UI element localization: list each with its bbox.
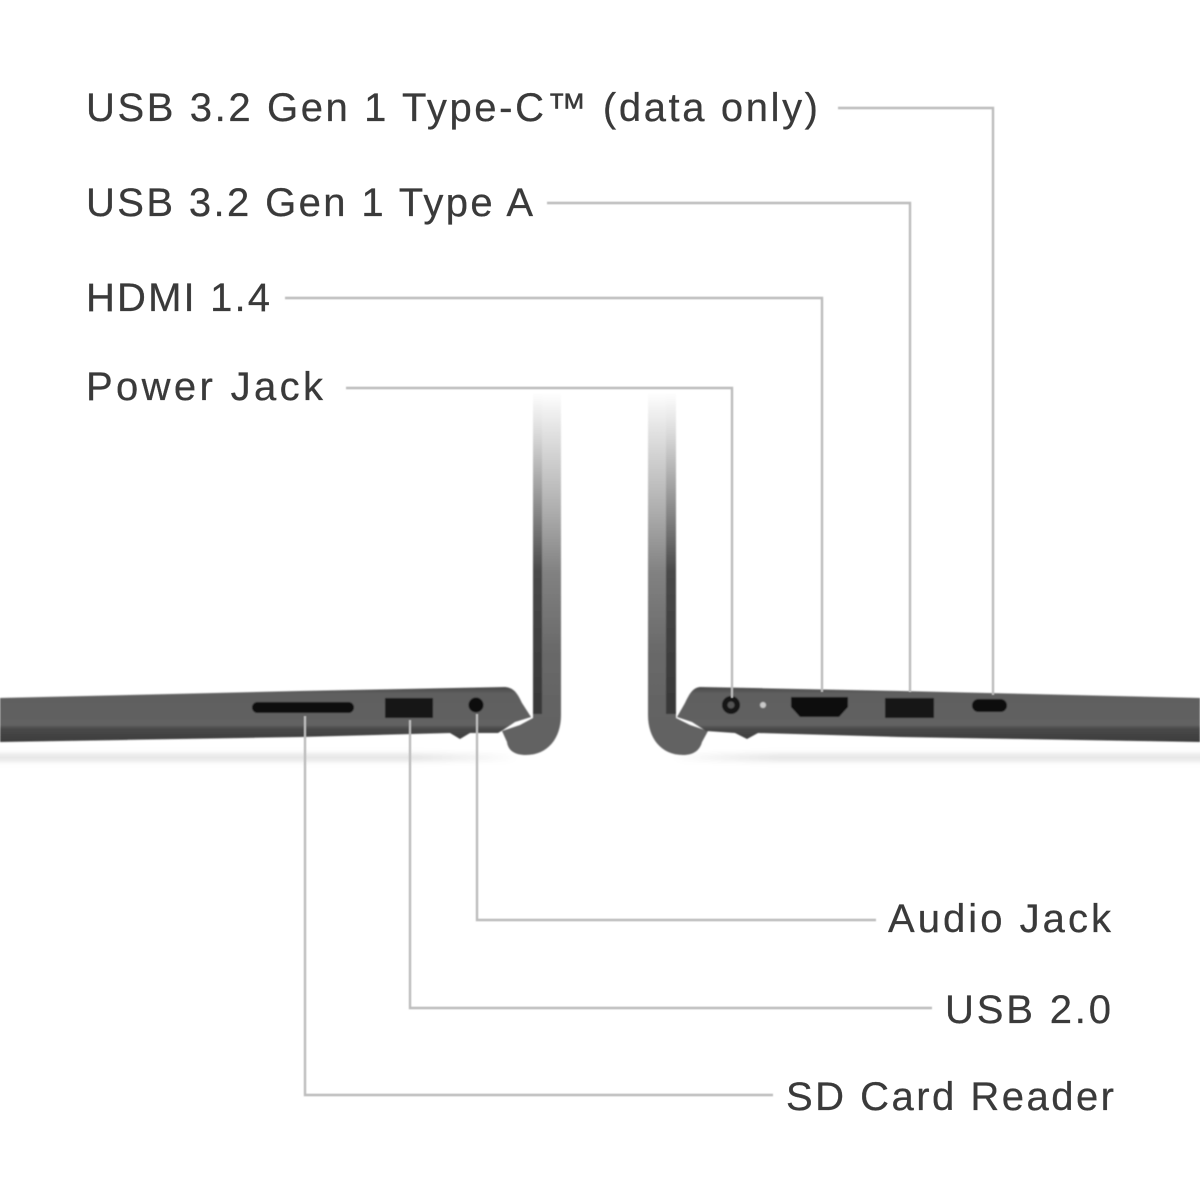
left laptop side xyxy=(0,392,561,755)
right lid and hinge xyxy=(648,392,708,755)
line: HDMI xyxy=(285,298,822,692)
ground shadow xyxy=(0,754,1200,761)
line: USB Type-C xyxy=(838,108,993,695)
status LED xyxy=(760,702,766,708)
left lid and hinge xyxy=(502,392,561,755)
label: USB 3.2 Gen 1 Type A: USB 3.2 Gen 1 Type A xyxy=(86,181,533,225)
line: SD card reader xyxy=(305,716,773,1095)
SD card slot xyxy=(252,702,354,713)
HDMI port xyxy=(791,697,848,717)
power jack xyxy=(722,696,740,714)
line: USB Type A xyxy=(547,203,910,692)
right base xyxy=(677,687,1200,742)
label: Audio Jack: Audio Jack xyxy=(888,897,1112,941)
label: HDMI 1.4: HDMI 1.4 xyxy=(86,276,270,320)
line: power jack xyxy=(346,388,732,698)
right laptop side xyxy=(648,392,1200,755)
USB Type A port xyxy=(885,698,934,718)
USB 2.0 port xyxy=(385,698,433,718)
label: USB 3.2 Gen 1 Type-C: USB 3.2 Gen 1 Type-C™ (data only) xyxy=(86,86,818,130)
audio jack xyxy=(468,698,484,712)
label: USB 2.0: USB 2.0 xyxy=(945,988,1111,1032)
line: audio jack xyxy=(477,714,876,920)
leader lines xyxy=(285,108,993,1095)
label: Power Jack: Power Jack xyxy=(86,365,324,409)
USB Type-C port xyxy=(972,699,1007,712)
line: USB 2.0 xyxy=(410,720,932,1008)
left base xyxy=(0,687,531,742)
label: SD Card Reader: SD Card Reader xyxy=(786,1075,1114,1119)
